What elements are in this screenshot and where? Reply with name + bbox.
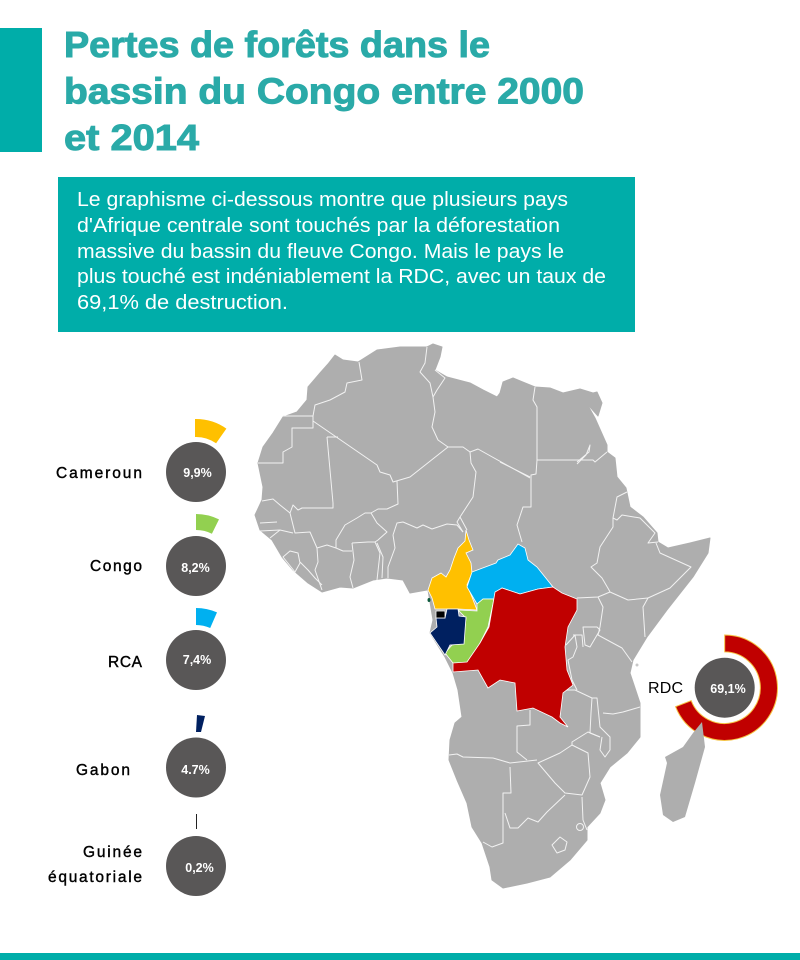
continent [255,344,710,888]
Gabon [430,609,466,655]
country borders [258,347,691,853]
title [64,24,584,158]
RCA circle [166,630,226,690]
title: et 2014 [64,117,199,158]
Madagascar [660,722,705,822]
RDC label: RDC [648,680,683,697]
Gabon value: 4.7% [181,763,210,777]
Congo [445,599,494,663]
Cameroun arc [195,419,226,443]
intro paragraph [77,189,606,314]
Congo stat [90,514,226,596]
Cameroon [428,530,477,610]
Guinée équatoriale arc [196,814,197,829]
intro text panel [58,177,635,332]
Congo label: Congo [90,558,142,575]
Zanzibar [636,664,638,666]
Guinée équatoriale circle [166,836,226,896]
Cameroun circle [166,442,226,502]
Cameroun value: 9,9% [183,466,212,480]
RDC value: 69,1% [710,682,746,696]
Congo value: 8,2% [181,561,210,575]
Cameroun label: Cameroun [56,465,142,482]
title: Pertes de forêts dans le [64,24,490,65]
title: bassin du Congo entre 2000 [64,70,584,112]
Gabon arc [196,715,205,732]
Cameroun stat [56,419,226,502]
RDC ring chart [676,635,777,740]
title accent block [0,28,42,152]
Congo circle [166,536,226,596]
DRC [453,587,577,727]
Guinée équatoriale label: Guinée [83,844,142,861]
RDC stat [648,658,755,718]
intro paragraph: d'Afrique centrale sont touchés par la déforestation [77,215,560,237]
RCA arc [196,608,217,628]
Guinée équatoriale label: équatoriale [48,869,142,886]
Gabon circle [166,738,226,798]
Gabon label: Gabon [76,762,130,779]
Equatorial Guinea [436,611,445,618]
Congo arc [196,514,219,534]
Gabon stat [76,715,226,798]
intro paragraph: 69,1% de destruction. [77,292,288,314]
RCA stat [108,608,226,690]
RDC circle [695,658,755,718]
Guinée équatoriale label [48,844,142,886]
Guinée équatoriale value: 0,2% [185,861,214,875]
Bioko island [428,598,430,602]
intro paragraph: massive du bassin du fleuve Congo. Mais le pays le [77,241,564,263]
Guinée équatoriale stat [48,814,226,896]
intro paragraph: plus touché est indéniablement la RDC, avec un taux de [77,266,606,288]
Central African Republic [467,544,553,604]
map of Africa [255,344,710,888]
bottom bar [0,953,800,960]
RCA label: RCA [108,654,143,671]
RCA value: 7,4% [183,653,211,667]
intro paragraph: Le graphisme ci-dessous montre que plusieurs pays [77,189,568,211]
